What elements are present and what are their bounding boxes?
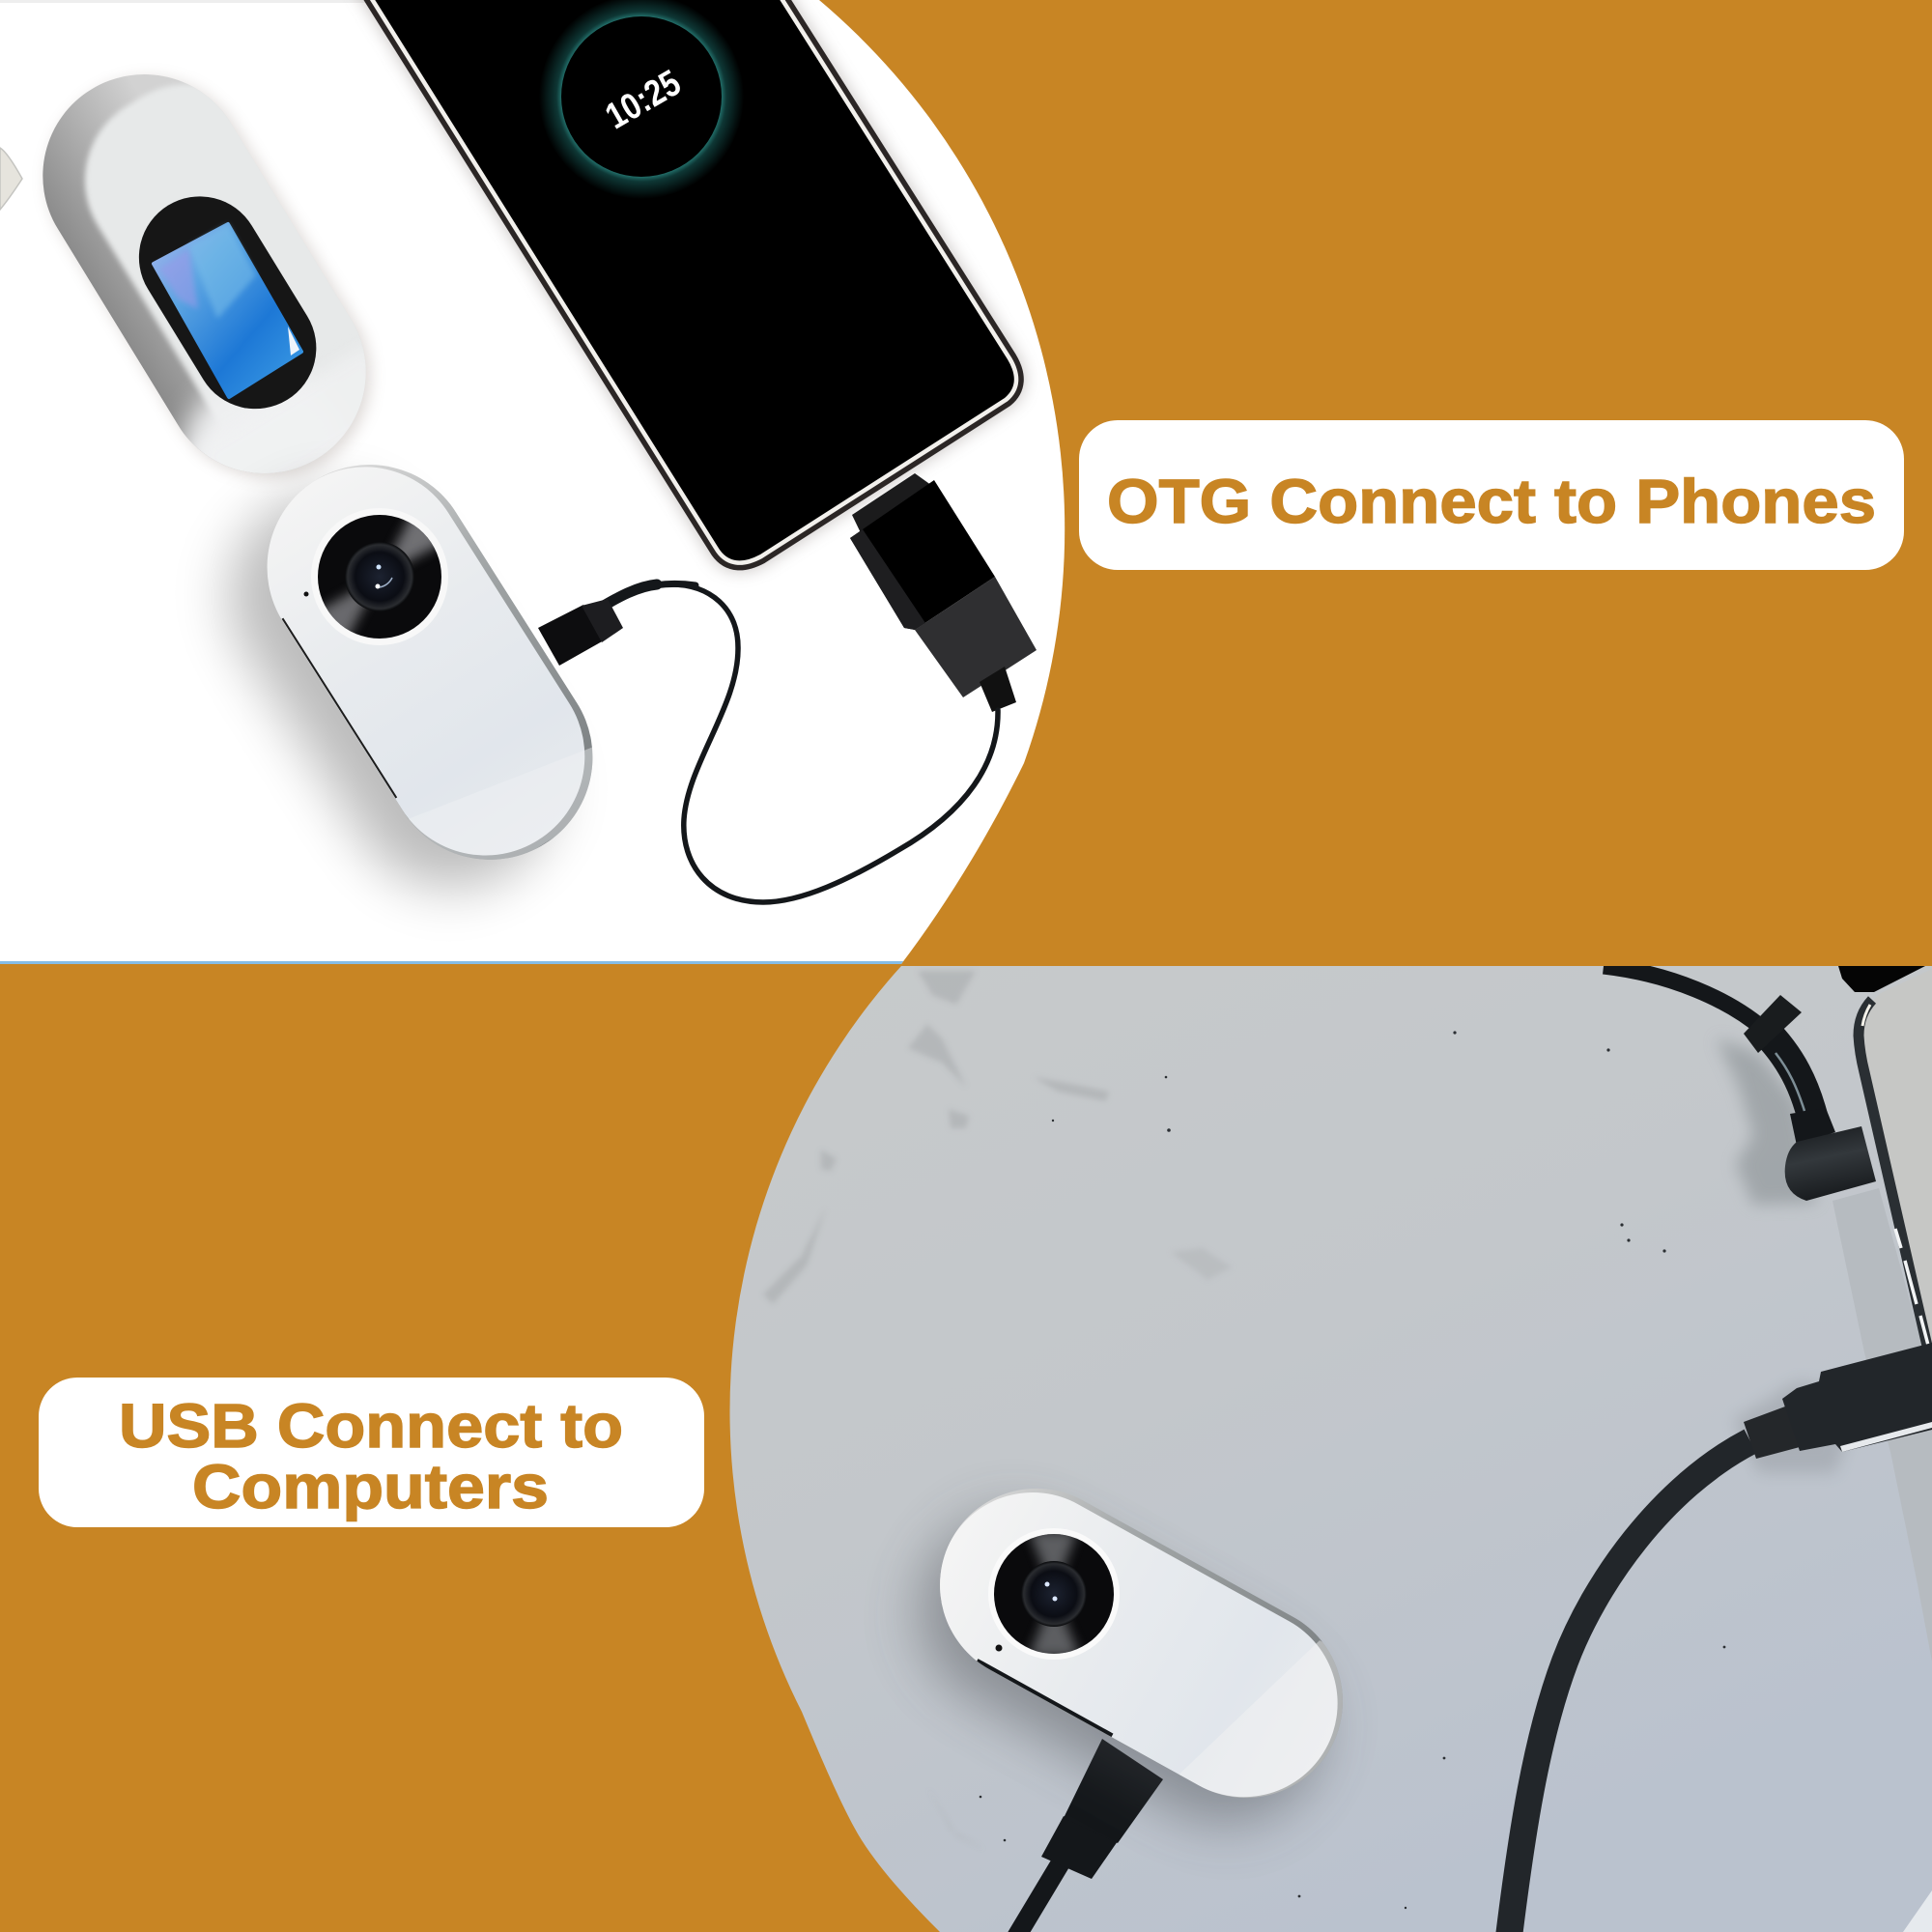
phone clock ring	[539, 0, 744, 199]
phone	[369, 0, 1014, 560]
panel: USB computer connection photo	[715, 966, 1932, 1932]
connector shadow	[1736, 1380, 1845, 1476]
phone clock time: 10:25	[599, 63, 688, 137]
label pill: OTG Connect to Phones: OTG Connect to Phones	[1107, 467, 1876, 536]
device: camera with lens	[203, 465, 593, 914]
panel: OTG phone connection photo	[0, 0, 1159, 964]
camera indicator dot	[303, 591, 309, 597]
desk camera indicator dot	[995, 1644, 1003, 1652]
upper cable	[1604, 966, 1812, 1116]
USB connector	[1744, 1343, 1932, 1459]
label pill: OTG Connect to Phones	[1079, 420, 1904, 570]
label pill: USB Connect to Computers	[39, 1378, 704, 1527]
desk camera lens	[988, 1528, 1120, 1660]
cable shadow	[1717, 1038, 1816, 1205]
cable clip	[1744, 995, 1802, 1053]
laptop edge	[1838, 966, 1932, 1346]
device display image	[154, 224, 301, 397]
label pill: USB Connect to Computers: Computers	[192, 1452, 549, 1521]
OTG adapter	[850, 473, 1037, 712]
camera lens	[311, 507, 448, 645]
device: camera on desk	[896, 1490, 1345, 1849]
lower connector	[1016, 1739, 1163, 1932]
device display bezel	[139, 196, 317, 410]
thick USB cable	[1509, 1441, 1750, 1932]
angled USB plug	[1785, 1108, 1876, 1201]
thin USB cable	[599, 583, 998, 902]
label pill: USB Connect to Computers: USB Connect to	[119, 1391, 623, 1461]
cable connector at camera	[538, 599, 623, 666]
device edge at left	[0, 148, 22, 210]
device: screen side	[42, 72, 377, 483]
surface stains	[765, 970, 1225, 1302]
shadow strip	[1833, 1188, 1932, 1662]
corner highlight	[1903, 1890, 1932, 1932]
